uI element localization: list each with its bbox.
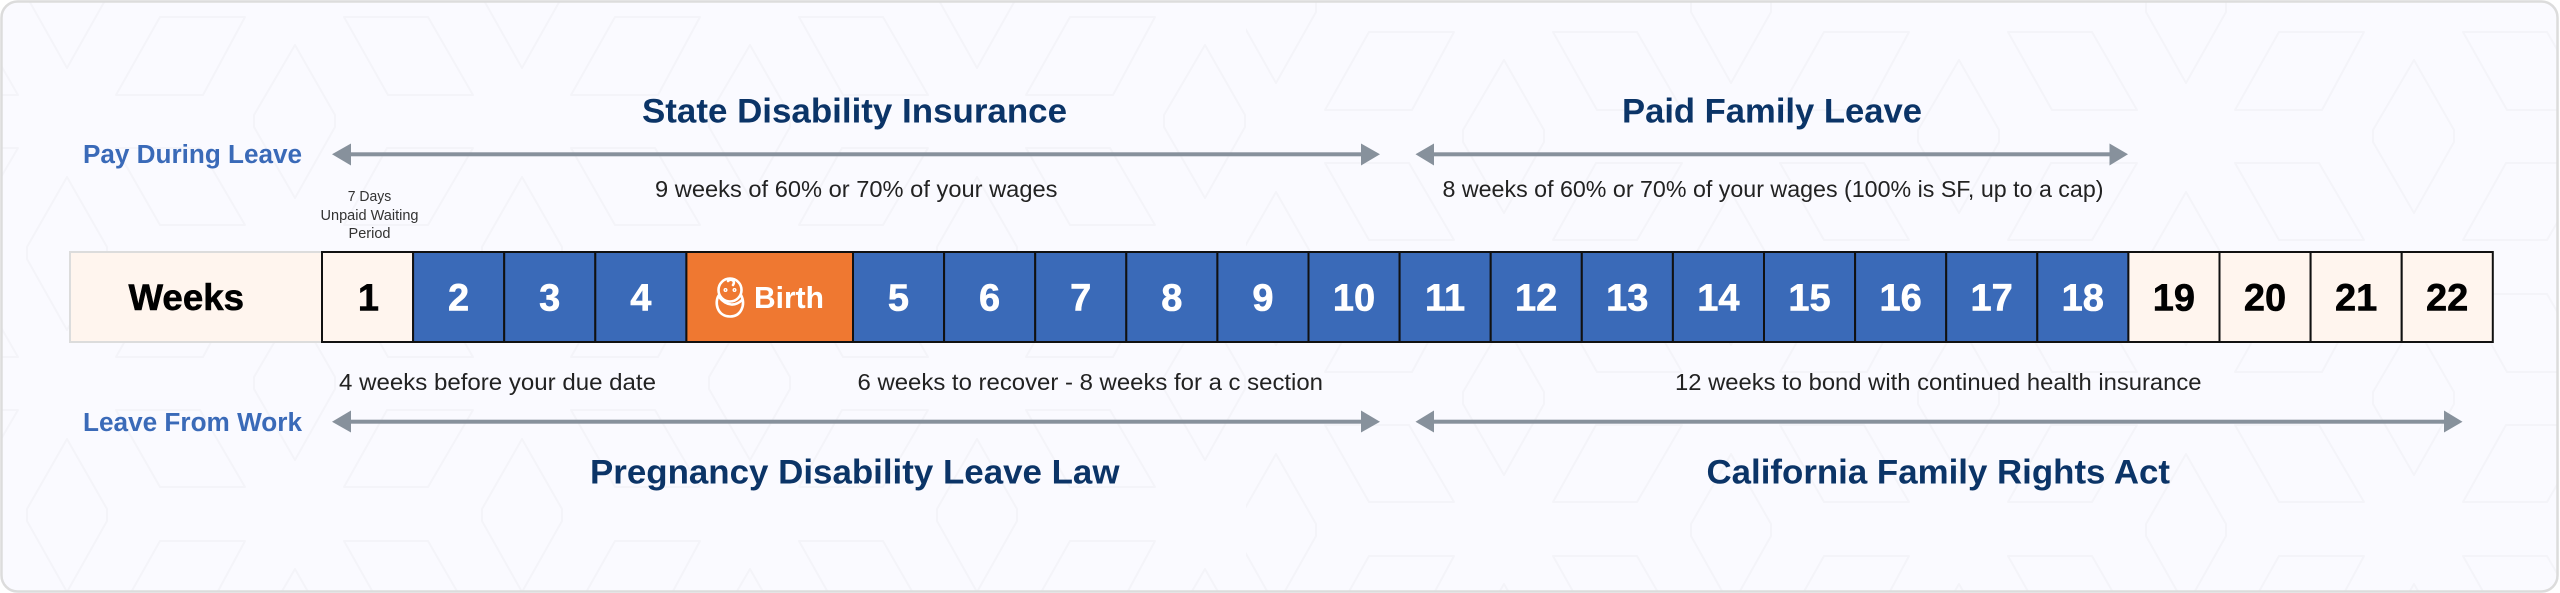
text: 8 weeks of pay: 8 weeks of 60% or 70% of your wages (100% is SF, up to a cap) [1442, 176, 2104, 202]
arrow: pregnancy disability leave span [332, 410, 1380, 432]
cell: week 6 [944, 252, 1035, 342]
cell: week 16: 16 [1879, 278, 1922, 320]
chart: weeks timeline [70, 252, 2493, 342]
cell: week 3 [504, 252, 595, 342]
cell: week 1 [322, 252, 413, 342]
cell: week 7: 7 [1070, 278, 1091, 320]
cell: week 20 [2220, 252, 2311, 342]
cell: week 8: 8 [1161, 278, 1182, 320]
cell: week 3: 3 [539, 278, 560, 320]
label: Pay During Leave: Pay During Leave [83, 141, 302, 169]
cell: week 1: 1 [358, 278, 379, 320]
cell: week 7 [1035, 252, 1126, 342]
cell: week 2: 2 [448, 278, 469, 320]
cell: week 12 [1491, 252, 1582, 342]
cell: week 11: 11 [1425, 278, 1465, 320]
cell: week 19 [2128, 252, 2220, 342]
cell: week 10 [1308, 252, 1400, 342]
cell: week 5 [853, 252, 944, 342]
arrow: state disability insurance span [332, 144, 1380, 166]
text: 9 weeks of pay: 9 weeks of 60% or 70% of your wages [655, 176, 1058, 202]
icon: swaddled baby [717, 278, 743, 316]
cell: week 4 [595, 252, 686, 342]
cell: weeks label [70, 252, 322, 342]
cell: week 9: 9 [1252, 278, 1273, 320]
cell: week 22 [2402, 252, 2493, 342]
cell: week 20: 20 [2244, 278, 2286, 320]
cell: week 2 [413, 252, 504, 342]
cell: birth: Birth [754, 280, 824, 315]
text: 4 weeks before due date: 4 weeks before your due date [339, 369, 656, 395]
cell: week 8 [1126, 252, 1217, 342]
cell: week 22: 22 [2426, 278, 2468, 320]
heading: Pregnancy Disability Leave Law: Pregnancy Disability Leave Law [590, 453, 1120, 491]
cell: weeks label: Weeks [128, 277, 244, 318]
heading: California Family Rights Act: California Family Rights Act [1706, 453, 2170, 491]
text: waiting period note: Unpaid Waiting [320, 208, 418, 224]
cell: week 6: 6 [979, 278, 1000, 320]
cell: week 21: 21 [2335, 278, 2377, 320]
cell: week 21 [2311, 252, 2402, 342]
cell: week 9 [1217, 252, 1308, 342]
cell: week 19: 19 [2153, 278, 2195, 320]
cell: week 18: 18 [2062, 278, 2104, 320]
cell: week 13 [1582, 252, 1673, 342]
cell: week 16 [1855, 252, 1946, 342]
cell: week 14 [1673, 252, 1764, 342]
cell: week 13: 13 [1606, 278, 1648, 320]
cell: birth [686, 252, 853, 342]
cell: week 10: 10 [1333, 278, 1375, 320]
cell: week 14: 14 [1697, 278, 1740, 320]
heading: State Disability Insurance: State Disability Insurance [642, 93, 1067, 131]
text: waiting period note: Period [348, 226, 390, 242]
cell: week 4: 4 [630, 278, 651, 320]
text: 6 weeks to recover: 6 weeks to recover - 8 weeks for a c section [858, 369, 1323, 395]
heading: Paid Family Leave: Paid Family Leave [1622, 93, 1922, 131]
cell: week 17: 17 [1971, 278, 2013, 320]
cell: week 15: 15 [1788, 278, 1831, 320]
text: 12 weeks to bond: 12 weeks to bond with continued health insurance [1675, 369, 2202, 395]
cell: week 5: 5 [888, 278, 909, 320]
arrow: paid family leave span [1416, 144, 2128, 166]
cell: week 17 [1946, 252, 2037, 342]
cell: week 12: 12 [1515, 278, 1557, 320]
arrow: california family rights span [1416, 410, 2462, 432]
text: waiting period note [320, 189, 418, 242]
cell: week 11 [1400, 252, 1491, 342]
label: Leave From Work: Leave From Work [83, 409, 303, 437]
cell: week 18 [2037, 252, 2128, 342]
text: waiting period note: 7 Days [348, 189, 391, 205]
cell: week 15 [1764, 252, 1855, 342]
